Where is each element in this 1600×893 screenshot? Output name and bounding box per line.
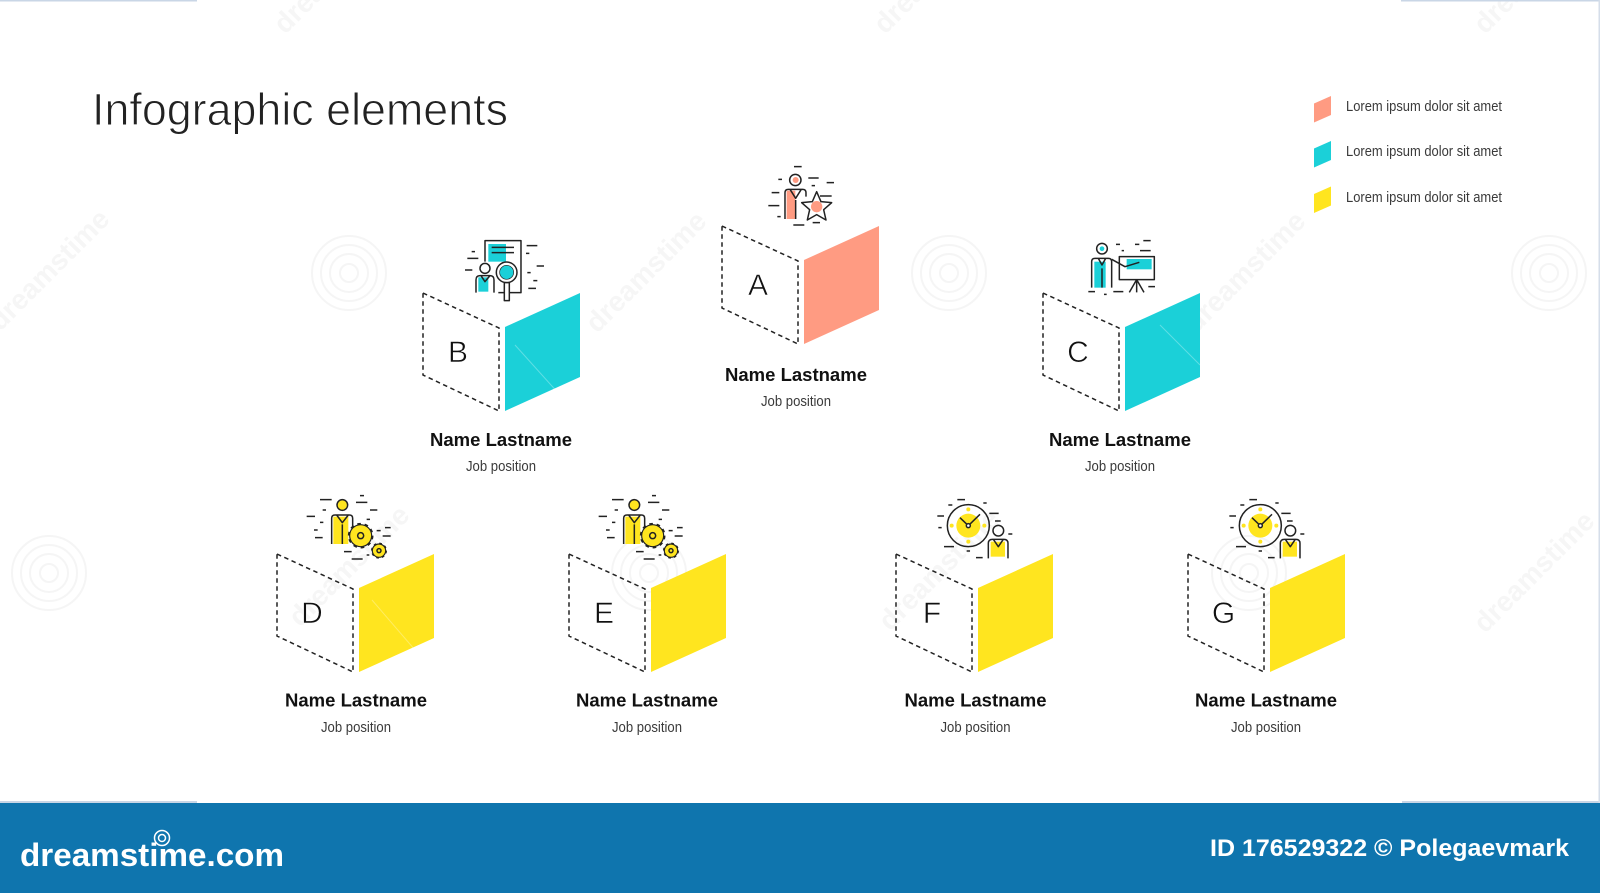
image id and credit: ID 176529322 © Polegaevmark (1210, 835, 1569, 862)
coloured face (804, 226, 879, 344)
node D (277, 496, 434, 736)
icon: person with gears (307, 496, 391, 559)
letter F: F (923, 597, 941, 630)
icon: person with gears (599, 496, 683, 559)
letter B: B (448, 336, 468, 369)
coloured face (359, 554, 434, 672)
legend item: yellow (1314, 186, 1502, 213)
node C (1043, 241, 1200, 475)
icon: clock with person (937, 500, 1012, 558)
letter E: E (594, 597, 614, 630)
name: Name Lastname (430, 429, 572, 450)
coloured face (978, 554, 1053, 672)
name: Name Lastname (725, 364, 867, 385)
node E (569, 496, 726, 736)
legend (1314, 96, 1502, 213)
infographic canvas: dreamstime (872, 503, 1005, 636)
icon: person with document and magnifier (465, 241, 544, 301)
coloured face (1270, 554, 1345, 672)
dashed face (277, 554, 353, 672)
job position: Job position (761, 394, 831, 410)
name: Name Lastname (576, 690, 718, 710)
letter D: D (301, 597, 323, 630)
infographic canvas: dreamstime (579, 205, 712, 338)
letter C: C (1067, 336, 1089, 369)
legend item: salmon: Lorem ipsum dolor sit amet (1346, 99, 1502, 115)
job position: Job position (321, 720, 391, 736)
title: Infographic elements (92, 84, 508, 135)
job position: Job position (612, 720, 682, 736)
dashed face (1188, 554, 1264, 672)
infographic canvas: dreamstime (1178, 205, 1311, 338)
name: Name Lastname (1049, 429, 1191, 450)
legend item: teal (1314, 141, 1502, 168)
logo: dreamstime.com (20, 837, 284, 873)
infographic canvas: dreamstime (282, 499, 415, 632)
icon: person with star (768, 167, 834, 225)
dashed face (569, 554, 645, 672)
job position: Job position (940, 720, 1010, 736)
icon: logo spiral (154, 830, 170, 846)
dashed face (722, 226, 798, 344)
footer bar (0, 803, 1600, 893)
dashed face (1043, 293, 1119, 411)
name: Name Lastname (904, 690, 1046, 710)
coloured face (505, 293, 580, 411)
job position: Job position (466, 459, 536, 475)
dashed face (896, 554, 972, 672)
letter A: A (748, 269, 768, 302)
coloured face (651, 554, 726, 672)
icon: presenter with board (1088, 241, 1155, 294)
coloured face (1125, 293, 1200, 411)
node F (896, 500, 1053, 736)
name: Name Lastname (1195, 690, 1337, 710)
node A (722, 167, 879, 410)
name: Name Lastname (285, 690, 427, 710)
node G (1188, 500, 1345, 736)
infographic canvas: dreamstime (1467, 505, 1600, 638)
dashed face (423, 293, 499, 411)
legend item: yellow: Lorem ipsum dolor sit amet (1346, 190, 1502, 206)
legend item: teal: Lorem ipsum dolor sit amet (1346, 144, 1502, 160)
letter G: G (1212, 597, 1235, 630)
job position: Job position (1231, 720, 1301, 736)
legend item: salmon (1314, 96, 1502, 122)
node B (423, 241, 580, 475)
icon: clock with person (1229, 500, 1304, 558)
job position: Job position (1085, 459, 1155, 475)
